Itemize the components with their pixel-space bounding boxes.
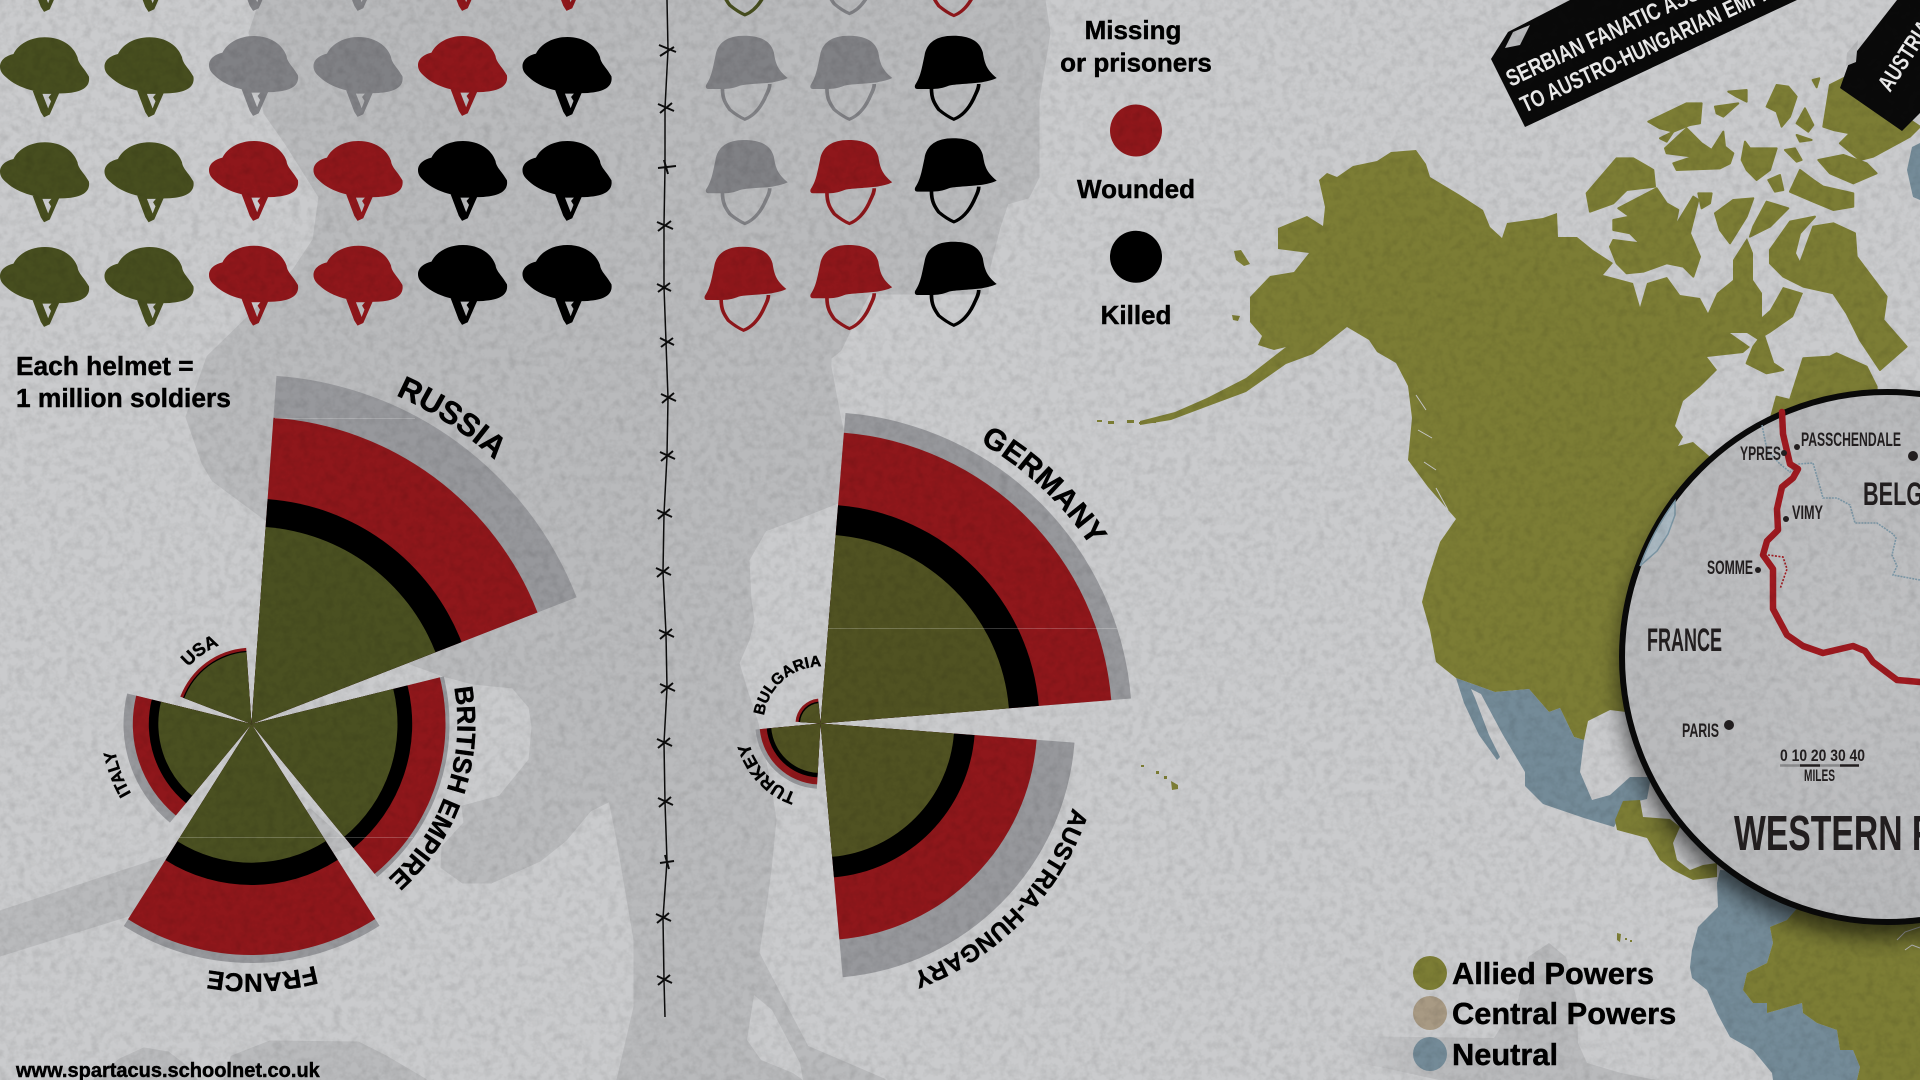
land: neutral south america bbox=[1690, 870, 1860, 1080]
front line bbox=[1763, 412, 1920, 682]
land: allied central america bbox=[1615, 800, 1717, 880]
scale bar: 0 10 20 30 40 bbox=[1780, 746, 1865, 765]
sector: france bbox=[124, 724, 380, 992]
helmet key: Each helmet = bbox=[16, 351, 194, 381]
inset shadow bbox=[1619, 406, 1920, 938]
barbed wire divider bbox=[656, 0, 676, 1017]
helmet key bbox=[16, 351, 231, 413]
town: paris: PARIS bbox=[1682, 721, 1719, 742]
sector: austria-hungary bbox=[820, 724, 1086, 989]
sector: british empire bbox=[252, 676, 476, 890]
label: wounded: Wounded bbox=[1077, 174, 1195, 204]
country label: france: FRANCE bbox=[1647, 622, 1722, 658]
town: brussels marker bbox=[1908, 451, 1918, 461]
land: allied south america bbox=[1743, 890, 1920, 1080]
land: iceland fragment bbox=[1907, 143, 1920, 200]
label: missing or prisoners: or prisoners bbox=[1060, 48, 1212, 78]
sector: bulgaria: BULGARIA bbox=[753, 656, 822, 715]
sector: usa: USA bbox=[180, 636, 219, 665]
channel sea bbox=[1640, 501, 1675, 566]
sector: italy: ITALY bbox=[103, 753, 131, 798]
label: killed: Killed bbox=[1101, 300, 1171, 330]
town: somme: SOMME bbox=[1707, 558, 1753, 579]
town: vimy bbox=[1783, 503, 1823, 524]
rose chart: central powers bbox=[737, 413, 1131, 989]
sector: germany: GERMANY bbox=[984, 428, 1108, 540]
belgian border bbox=[1762, 425, 1920, 580]
land: neutral mexico bbox=[1456, 678, 1651, 827]
north america map bbox=[1097, 77, 1920, 1080]
sector: russia bbox=[252, 376, 576, 724]
swatch: allied powers bbox=[1413, 956, 1447, 990]
label: missing or prisoners: Missing bbox=[1085, 15, 1181, 45]
sector: germany bbox=[820, 413, 1131, 724]
sector: british empire: BRITISH EMPIRE bbox=[388, 686, 476, 890]
swatch: neutral bbox=[1413, 1037, 1447, 1071]
swatch: killed bbox=[1110, 231, 1162, 283]
inset: western front map bbox=[1619, 392, 1920, 938]
sector: russia: RUSSIA bbox=[397, 376, 503, 460]
legend: casualty types bbox=[1060, 15, 1212, 330]
helmet key: 1 million soldiers bbox=[16, 383, 231, 413]
label: central powers: Central Powers bbox=[1452, 996, 1676, 1031]
town: ypres: YPRES bbox=[1740, 444, 1781, 465]
rose chart: allied powers bbox=[103, 376, 576, 992]
swatch: central powers bbox=[1413, 996, 1447, 1030]
small pacific islands bbox=[1097, 250, 1632, 942]
sector: turkey: TURKEY bbox=[737, 746, 793, 805]
sector: turkey bbox=[737, 724, 820, 805]
sector: france: FRANCE bbox=[207, 966, 318, 992]
scale bar: MILES bbox=[1804, 766, 1835, 785]
sector: austria-hungary: AUSTRIA-HUNGARY bbox=[918, 808, 1086, 989]
timeline label: austria bbox=[1840, 0, 1920, 131]
scale bar bbox=[1780, 746, 1865, 785]
town: vimy: VIMY bbox=[1792, 503, 1823, 524]
sector: usa bbox=[180, 636, 252, 724]
pacific coast fjords bbox=[1330, 332, 1448, 510]
land: allied north america bbox=[1140, 150, 1803, 740]
front line: somme advance bbox=[1768, 555, 1787, 589]
helmets: central powers soldiers bbox=[705, 0, 997, 330]
label: neutral: Neutral bbox=[1452, 1037, 1558, 1072]
sector: italy bbox=[103, 694, 252, 822]
helmets: allied soldiers bbox=[0, 0, 612, 327]
legend: map alliances bbox=[1413, 956, 1676, 1072]
inset disc bbox=[1622, 392, 1920, 922]
arctic islands bbox=[1587, 77, 1920, 433]
label: allied powers: Allied Powers bbox=[1452, 956, 1654, 991]
swatch: wounded bbox=[1110, 104, 1162, 156]
